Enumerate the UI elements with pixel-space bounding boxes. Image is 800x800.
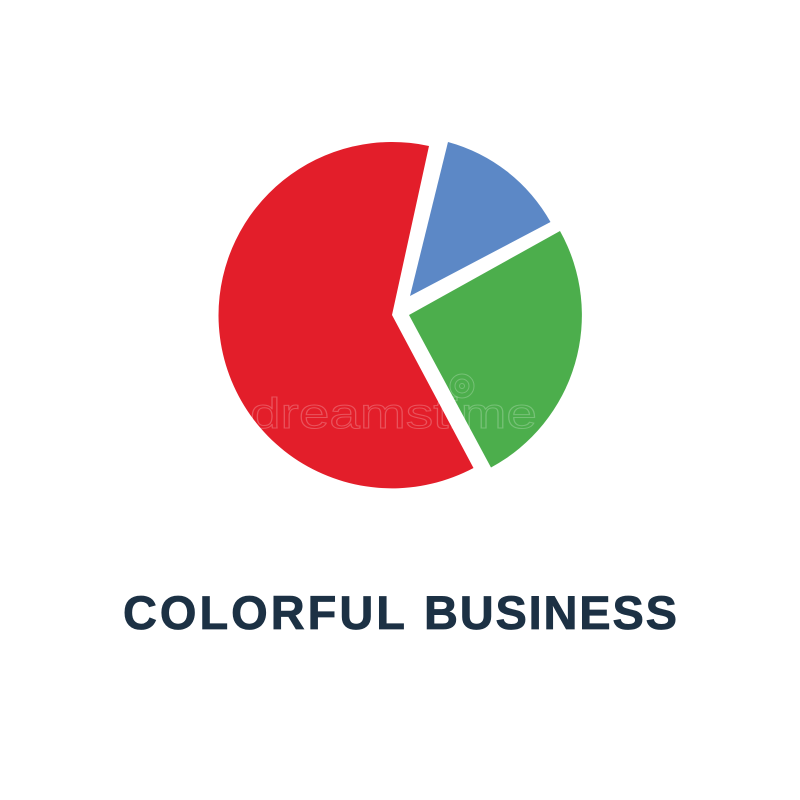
pie slice: blue [410,142,550,296]
watermark text: dreamstime [250,390,537,438]
watermark spiral icon [450,374,474,398]
title: COLORFUL [123,586,405,639]
title: BUSINESS [424,586,677,639]
watermark [250,374,537,438]
pie slice: green [409,231,582,468]
pie chart [218,142,582,488]
pie slice: red [218,142,474,488]
title [123,586,677,639]
